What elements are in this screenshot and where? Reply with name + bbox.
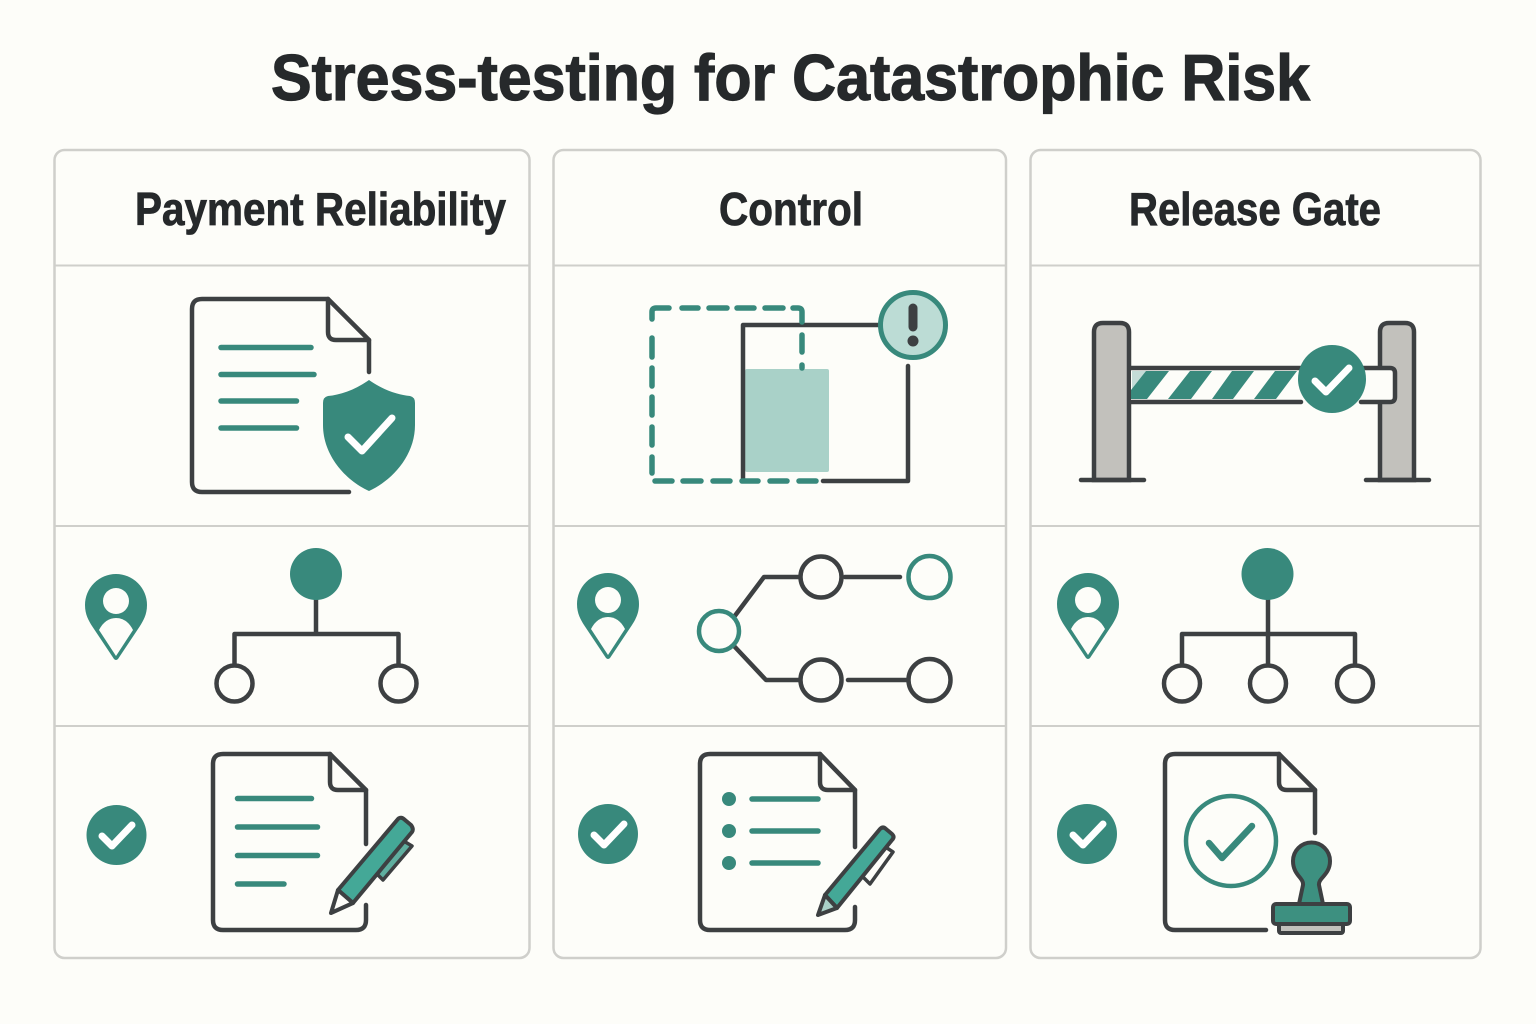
title: Stress-testing for Catastrophic Risk [271,41,1311,114]
diagram: branching flow [699,556,950,701]
icon: check badge [578,804,638,864]
icon: overlapping boundary with alert [652,292,946,481]
icon: person location pin [85,574,147,660]
icon: boom gate with check [1081,323,1429,480]
icon: document with stamp [1165,754,1350,933]
diagram: tree with two children [216,548,416,702]
icon: checklist with pen [700,754,894,930]
panel: Control [554,150,1006,958]
icon: document with pen [213,754,413,930]
panel: Payment Reliability [54,150,530,958]
heading: Control: Control [719,183,863,235]
icon: check badge [1057,804,1117,864]
icon: document with shield [192,299,415,492]
icon: check badge [86,805,146,865]
diagram: tree with three children [1164,548,1373,702]
icon: person location pin [1057,573,1119,659]
heading: Payment Reliability: Payment Reliability [135,183,506,235]
heading: Release Gate: Release Gate [1129,183,1381,235]
panel: Release Gate [1030,150,1480,958]
icon: person location pin [577,573,639,659]
